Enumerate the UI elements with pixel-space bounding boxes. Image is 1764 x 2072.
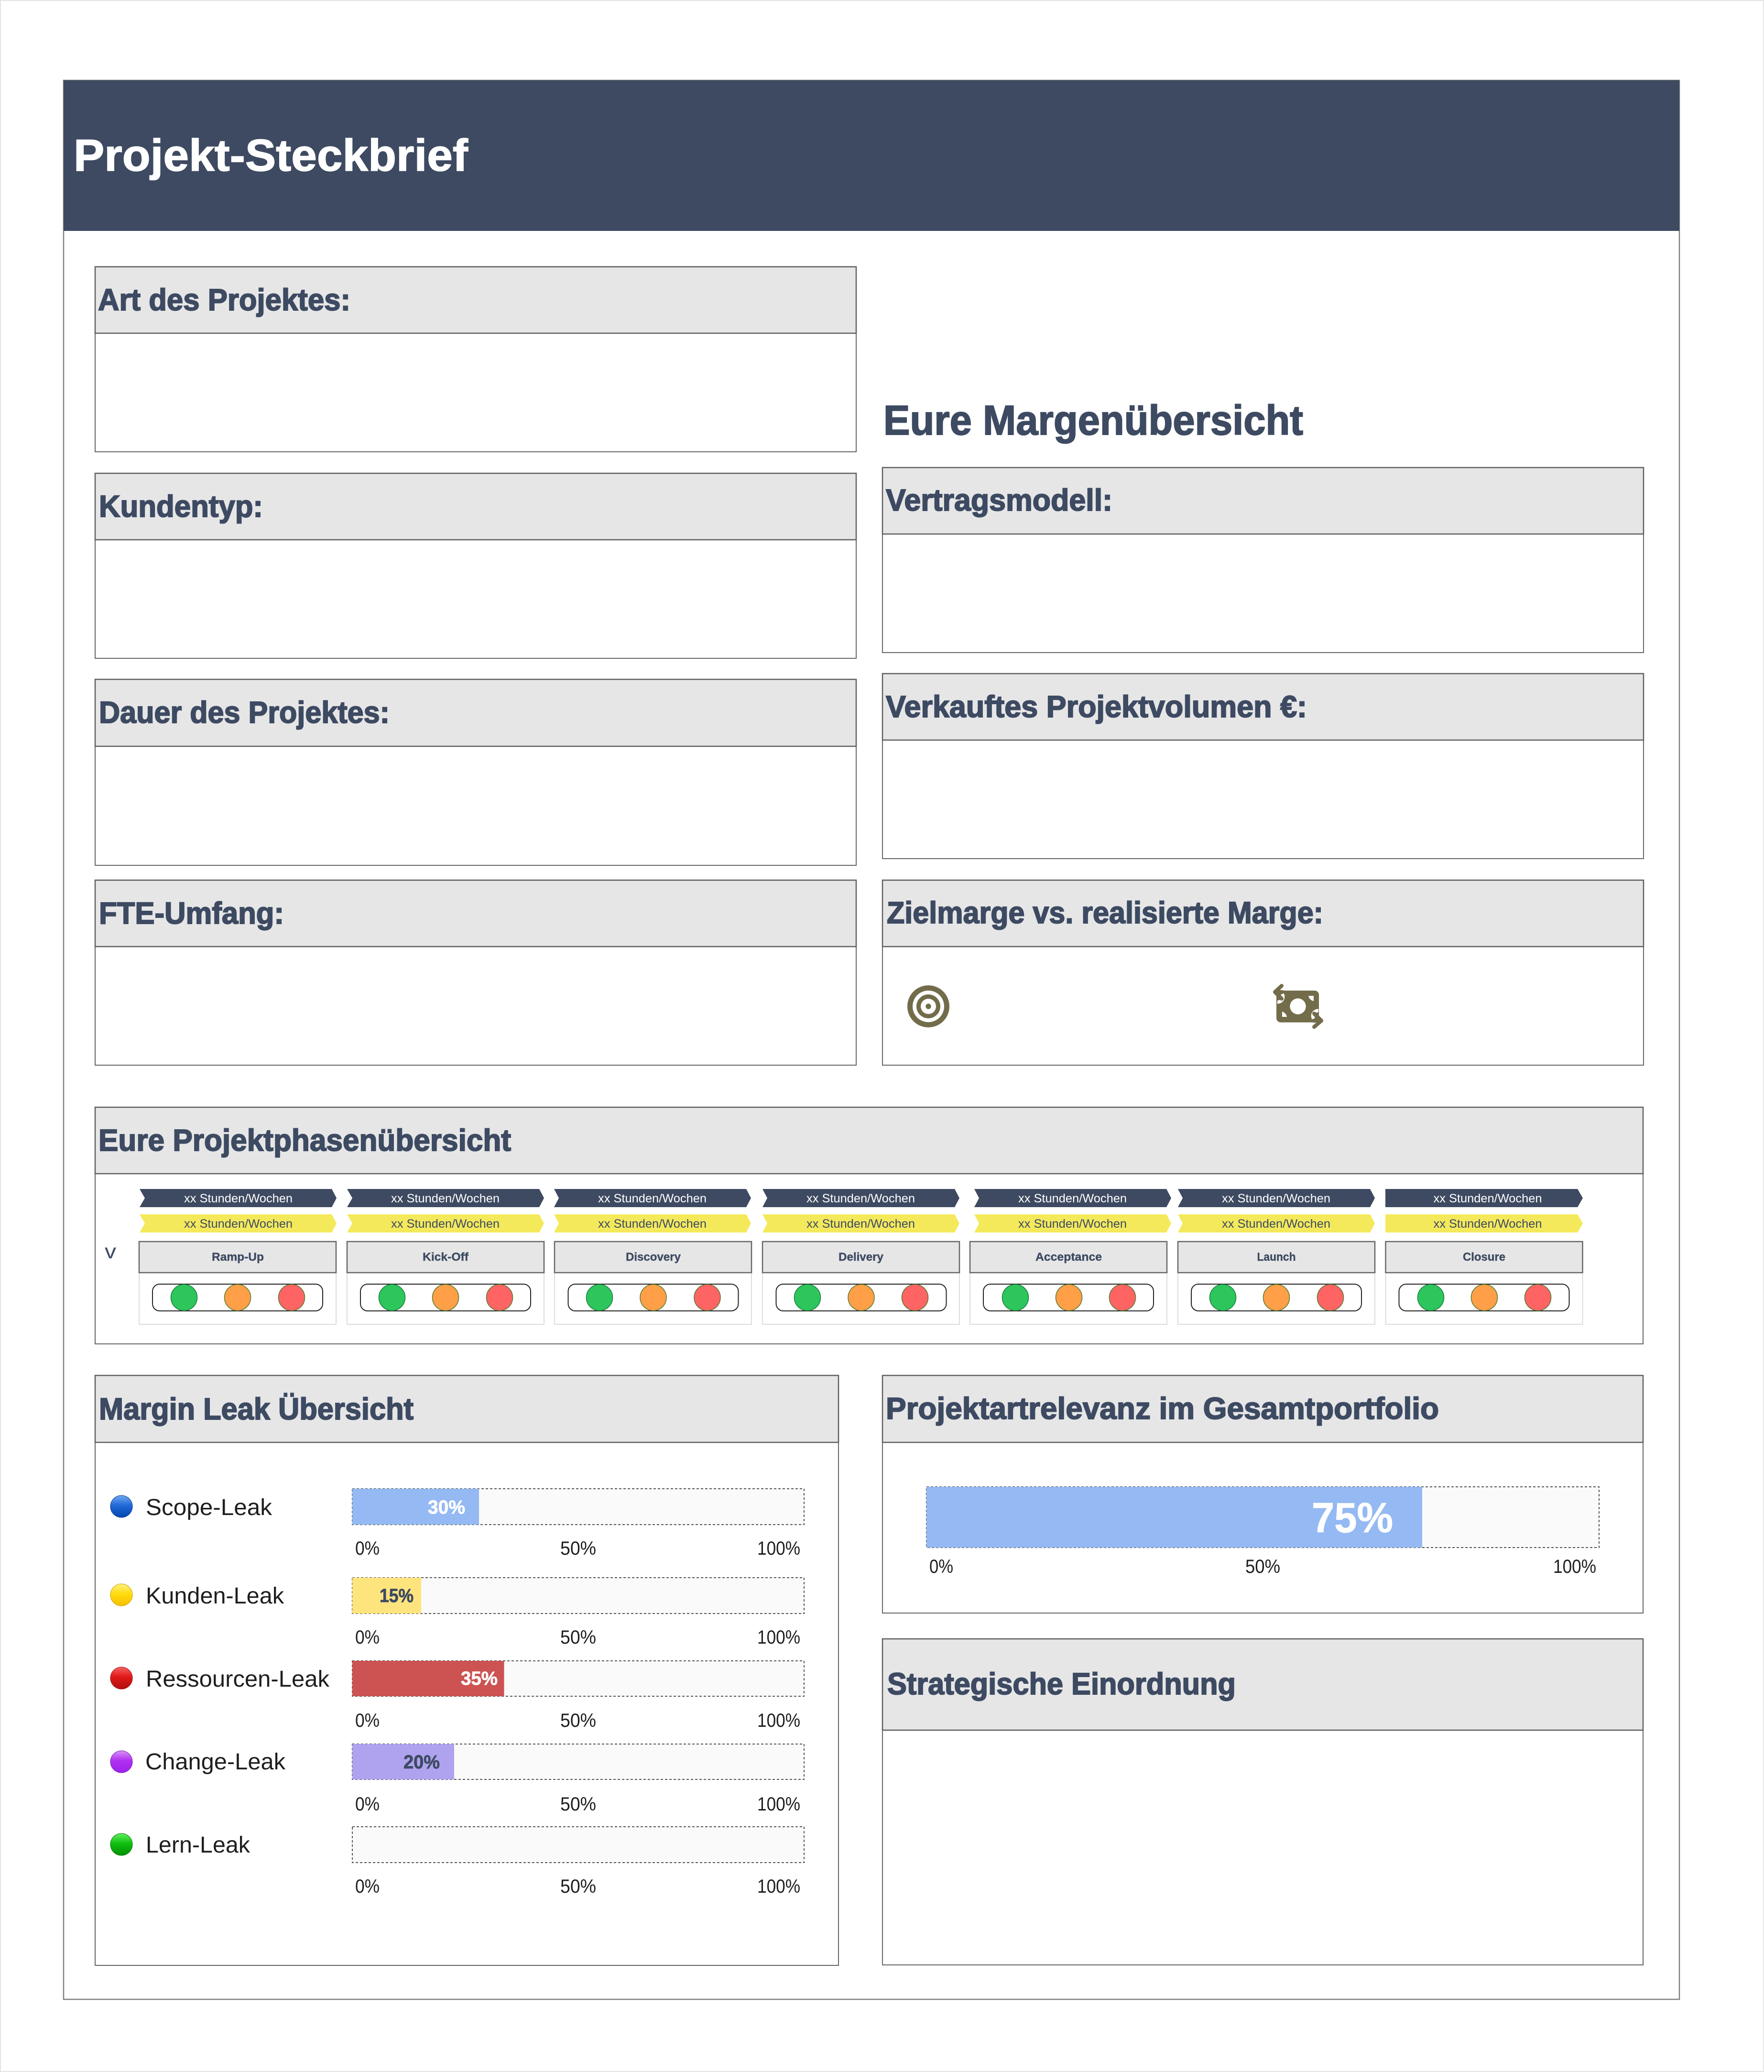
leak row: Change-Leak: 0% xyxy=(355,1794,380,1815)
phase: Launch xyxy=(1178,1189,1375,1324)
progress bar 75% xyxy=(926,1487,1599,1577)
phase: Launch: Launch xyxy=(1257,1251,1296,1264)
title banner xyxy=(64,80,1679,231)
leak row: Lern-Leak: 50% xyxy=(560,1876,596,1897)
heading: Strategische Einordnung xyxy=(887,1667,1236,1701)
heading: Zielmarge vs. realisierte Marge: xyxy=(887,895,1323,930)
phase: Acceptance xyxy=(970,1189,1171,1324)
progress bar 75%: 50% xyxy=(1245,1556,1280,1577)
phase: Delivery: Delivery xyxy=(838,1251,884,1264)
phase: Acceptance: xx Stunden/Wochen xyxy=(1018,1217,1127,1231)
phase: Delivery: xx Stunden/Wochen xyxy=(806,1192,915,1205)
title: Projekt-Steckbrief xyxy=(74,130,468,180)
phase: Acceptance: Acceptance xyxy=(1035,1251,1102,1264)
panel: Strategische Einordnung xyxy=(882,1639,1643,1965)
stray letter v: v xyxy=(105,1240,117,1263)
icon: money exchange xyxy=(1275,986,1321,1027)
heading: Eure Projektphasenübersicht xyxy=(98,1123,511,1157)
leak row: Kunden-Leak xyxy=(110,1578,804,1648)
phase: Kick-Off: Kick-Off xyxy=(423,1251,469,1264)
leak row: Scope-Leak: 100% xyxy=(757,1538,800,1559)
phase: Launch: xx Stunden/Wochen xyxy=(1222,1217,1330,1231)
leak row: Ressourcen-Leak xyxy=(110,1661,804,1731)
leak row: Scope-Leak: 0% xyxy=(355,1538,380,1559)
leak row: Kunden-Leak: 0% xyxy=(355,1627,380,1648)
section heading: Eure Margenübersicht: Eure Margenübersicht xyxy=(883,397,1303,444)
progress bar 75%: 0% xyxy=(929,1556,953,1577)
heading: Dauer des Projektes: xyxy=(99,695,390,730)
phase: Ramp-Up: Ramp-Up xyxy=(212,1251,264,1264)
phase: Ramp-Up: xx Stunden/Wochen xyxy=(184,1217,293,1231)
phase: Closure: xx Stunden/Wochen xyxy=(1433,1217,1542,1231)
panel: Vertragsmodell xyxy=(882,468,1644,653)
leak row: Scope-Leak xyxy=(110,1489,804,1559)
leak row: Kunden-Leak: 15% xyxy=(380,1585,414,1606)
icon: target xyxy=(907,985,949,1027)
leak row: Change-Leak: Change-Leak xyxy=(145,1749,286,1775)
heading: Verkauftes Projektvolumen €: xyxy=(886,689,1307,724)
heading: Art des Projektes: xyxy=(98,283,350,317)
leak row: Ressourcen-Leak: 100% xyxy=(757,1710,800,1731)
phase: Discovery: Discovery xyxy=(626,1251,681,1264)
leak row: Scope-Leak: 50% xyxy=(560,1538,596,1559)
leak row: Lern-Leak xyxy=(110,1827,804,1897)
phase: Acceptance: xx Stunden/Wochen xyxy=(1018,1192,1127,1205)
phase: Discovery xyxy=(554,1189,751,1324)
panel: FTE-Umfang xyxy=(95,880,856,1065)
phase: Closure: Closure xyxy=(1463,1251,1505,1264)
panel: Eure Projektphasenübersicht xyxy=(95,1107,1643,1344)
phase: Closure: xx Stunden/Wochen xyxy=(1433,1192,1542,1205)
phase: Delivery xyxy=(762,1189,959,1324)
panel: Verkauftes Projektvolumen xyxy=(882,674,1644,859)
panel: Kundentyp xyxy=(95,473,856,658)
leak row: Ressourcen-Leak: 35% xyxy=(461,1668,498,1689)
phase: Kick-Off: xx Stunden/Wochen xyxy=(391,1217,500,1231)
phase: Closure xyxy=(1385,1189,1583,1324)
leak row: Lern-Leak: 100% xyxy=(757,1876,800,1897)
leak row: Change-Leak xyxy=(110,1744,804,1815)
panel: Margin Leak Übersicht xyxy=(95,1375,838,1965)
phase: Discovery: xx Stunden/Wochen xyxy=(598,1192,707,1205)
leak row: Scope-Leak: Scope-Leak xyxy=(146,1495,272,1520)
leak row: Lern-Leak: Lern-Leak xyxy=(146,1832,250,1858)
leak row: Change-Leak: 50% xyxy=(560,1794,596,1815)
progress bar 75%: 75% xyxy=(1312,1494,1393,1541)
leak row: Change-Leak: 100% xyxy=(757,1794,800,1815)
leak row: Kunden-Leak: 50% xyxy=(560,1627,596,1648)
heading: FTE-Umfang: xyxy=(99,896,284,930)
panel: Zielmarge vs. realisierte Marge xyxy=(882,880,1644,1065)
phase: Ramp-Up: xx Stunden/Wochen xyxy=(184,1192,293,1205)
phase: Discovery: xx Stunden/Wochen xyxy=(598,1217,707,1231)
phase: Kick-Off xyxy=(347,1189,544,1324)
heading: Margin Leak Übersicht xyxy=(99,1392,414,1426)
phase: Ramp-Up xyxy=(139,1189,337,1324)
leak row: Change-Leak: 20% xyxy=(403,1752,440,1773)
leak row: Ressourcen-Leak: 0% xyxy=(355,1710,380,1731)
phase: Delivery: xx Stunden/Wochen xyxy=(806,1217,915,1231)
leak row: Scope-Leak: 30% xyxy=(428,1497,465,1518)
phase: Kick-Off: xx Stunden/Wochen xyxy=(391,1192,500,1205)
heading: Kundentyp: xyxy=(99,489,263,523)
panel: Art des Projektes xyxy=(95,267,856,452)
heading: Vertragsmodell: xyxy=(886,483,1112,517)
panel: Projektartrelevanz im Gesamtportfolio xyxy=(882,1375,1643,1613)
leak row: Kunden-Leak: Kunden-Leak xyxy=(146,1583,284,1609)
leak row: Lern-Leak: 0% xyxy=(355,1876,380,1897)
progress bar 75%: 100% xyxy=(1553,1556,1596,1577)
leak row: Ressourcen-Leak: 50% xyxy=(560,1710,596,1731)
phase: Launch: xx Stunden/Wochen xyxy=(1222,1192,1330,1205)
leak row: Kunden-Leak: 100% xyxy=(757,1627,800,1648)
heading: Projektartrelevanz im Gesamtportfolio xyxy=(886,1391,1439,1426)
panel: Dauer des Projektes xyxy=(95,679,856,865)
leak row: Ressourcen-Leak: Ressourcen-Leak xyxy=(146,1667,330,1692)
